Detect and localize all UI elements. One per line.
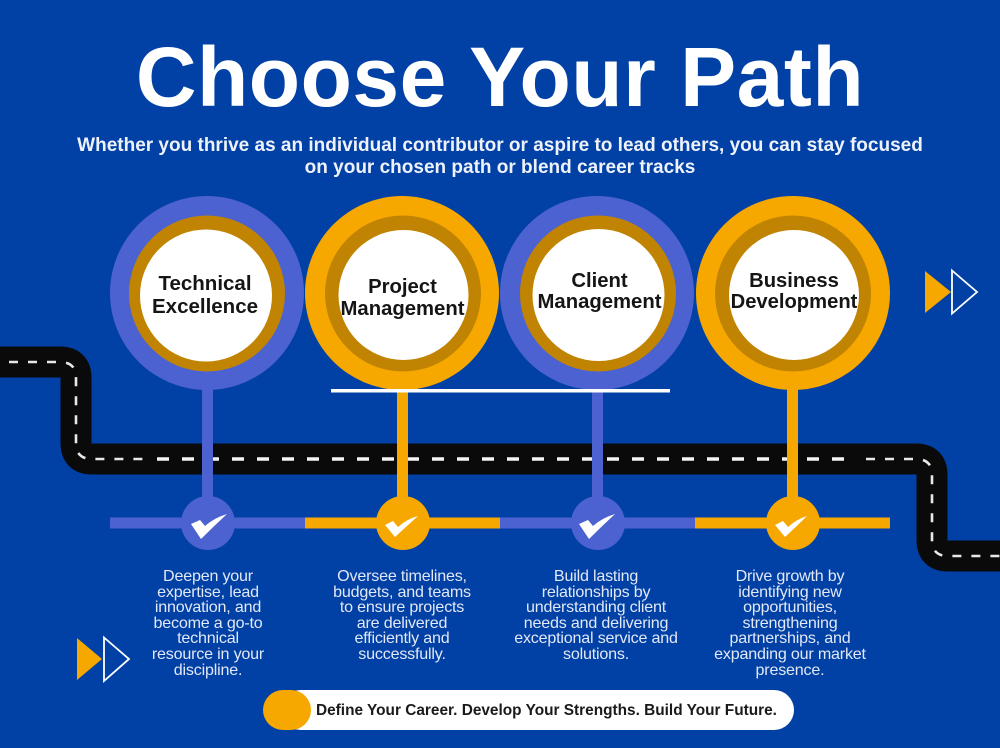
label: technical excellence: Technical: [158, 272, 252, 295]
description 2: efficiently and: [354, 629, 450, 647]
description 3: exceptional service and: [514, 629, 678, 647]
description 2: Oversee timelines,: [337, 567, 467, 585]
check node 4: [766, 496, 820, 550]
tagline pill: [263, 690, 794, 730]
label: business development: [731, 270, 858, 313]
check node 2: [376, 496, 430, 550]
description 4: [714, 567, 866, 679]
description 1: Deepen your: [163, 567, 253, 585]
description 3: solutions.: [563, 645, 629, 663]
description 3: Build lasting: [554, 567, 638, 585]
road: [0, 362, 1000, 556]
pill white background: [281, 690, 794, 730]
tagline text: Define Your Career. Develop Your Strengths. Build Your Future.: [316, 702, 777, 719]
description 4: presence.: [756, 661, 824, 679]
description 1: become a go-to: [153, 614, 263, 632]
check node 1: [181, 496, 235, 550]
subtitle: Whether you thrive as an individual contributor or aspire to lead others, you can stay focused: [77, 135, 923, 156]
label: project management: Project: [368, 276, 437, 298]
title: Choose Your Path: [136, 30, 864, 124]
label: client management: Client: [571, 270, 628, 292]
timeline bars: [110, 518, 890, 528]
description 1: technical: [177, 629, 239, 647]
description 2: to ensure projects: [340, 598, 464, 616]
description 1: resource in your: [152, 645, 264, 663]
subtitle: [77, 135, 923, 178]
description 1: innovation, and: [155, 598, 261, 616]
description 4: strengthening: [743, 614, 837, 632]
white divider line: [331, 389, 670, 392]
label: client management: [538, 270, 662, 313]
description 1: [152, 567, 264, 679]
pill orange cap: [263, 690, 311, 730]
description 2: are delivered: [357, 614, 447, 632]
description 4: identifying new: [738, 583, 842, 601]
label: project management: Management: [341, 298, 464, 320]
description 4: opportunities,: [743, 598, 837, 616]
label: business development: Development: [731, 291, 857, 313]
label: business development: Business: [749, 270, 839, 292]
description 4: partnerships, and: [730, 629, 850, 647]
icon: arrows bottom left: [77, 638, 129, 681]
connector stems: [202, 385, 798, 510]
icon: arrows top right: [925, 270, 977, 314]
description 3: relationships by: [542, 583, 650, 601]
check node 3: [571, 496, 625, 550]
circle: client management: [500, 196, 694, 390]
circle: project management: [305, 196, 499, 390]
description 1: expertise, lead: [157, 583, 259, 601]
label: project management: [341, 276, 464, 320]
label: technical excellence: [152, 272, 258, 318]
subtitle: on your chosen path or blend career tracks: [305, 157, 695, 178]
description 1: discipline.: [174, 661, 242, 679]
description 3: [514, 567, 678, 663]
label: technical excellence: Excellence: [152, 294, 258, 318]
description 2: [333, 567, 471, 663]
description 3: understanding client: [526, 598, 666, 616]
circle: technical excellence: [110, 196, 304, 390]
description 2: budgets, and teams: [333, 583, 471, 601]
circle: business development: [696, 196, 890, 390]
description 4: expanding our market: [714, 645, 866, 663]
description 3: needs and delivering: [524, 614, 668, 632]
description 2: successfully.: [358, 645, 446, 663]
label: client management: Management: [538, 291, 661, 313]
description 4: Drive growth by: [736, 567, 844, 585]
